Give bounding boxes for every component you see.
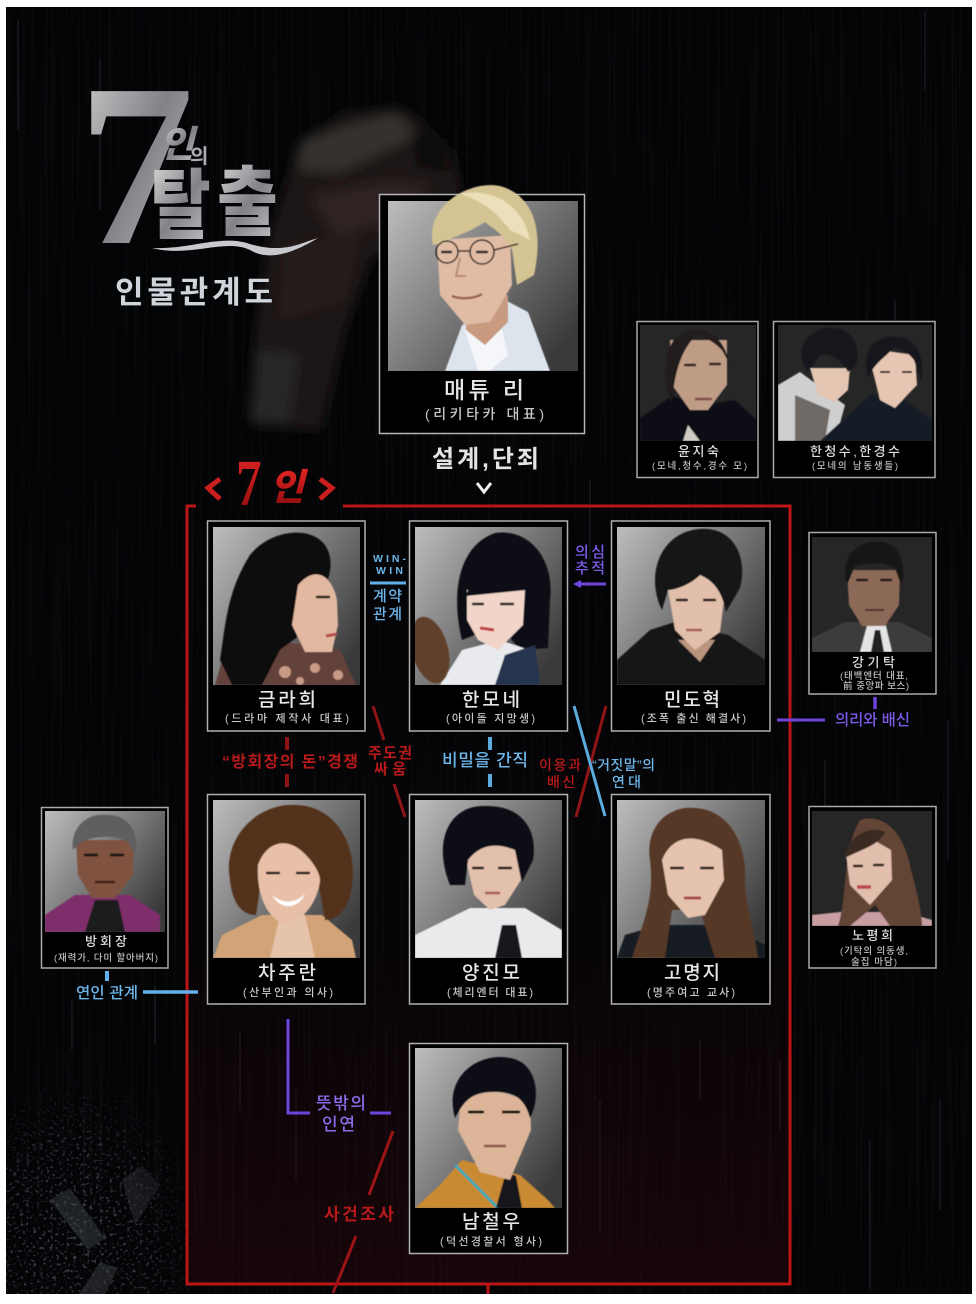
logo: 7인의 탈출: 인 bbox=[160, 124, 199, 165]
portrait: 민도혁 bbox=[617, 529, 765, 685]
card: 한모네 bbox=[404, 521, 568, 731]
name: 윤지숙 bbox=[678, 444, 719, 459]
relation: 의심 추적 arrow bbox=[573, 544, 606, 588]
relation: 뜻밖의 인연: 인연 bbox=[322, 1115, 355, 1134]
name: 금라희 bbox=[258, 689, 316, 711]
name: 남철우 bbox=[462, 1211, 520, 1233]
relation: 사건조사: 사건조사 bbox=[324, 1205, 394, 1224]
relation: 사건조사 bbox=[324, 1131, 394, 1293]
heading label: 7인: 인 bbox=[270, 467, 309, 508]
relation: WIN-WIN 계약관계: WIN bbox=[376, 565, 403, 577]
relation: 비밀을 간직 bbox=[442, 737, 528, 787]
role: (모네의 남동생들) bbox=[812, 460, 898, 472]
role: (조폭 출신 해결사) bbox=[641, 712, 746, 725]
portrait: 고명지 bbox=[617, 808, 765, 958]
role: (산부인과 의사) bbox=[243, 986, 333, 999]
portrait: 노평희 bbox=[812, 818, 932, 926]
name: 민도혁 bbox=[664, 689, 720, 711]
portrait: 방회장 bbox=[45, 815, 160, 932]
logo: 7인의 탈출: 의 bbox=[190, 145, 208, 168]
card: 강기탁: 前 중앙파 보스) bbox=[843, 680, 909, 692]
arrow: chevron down bbox=[477, 483, 491, 492]
relation: 이용과 배신: 이용과 bbox=[539, 757, 581, 773]
card: 양진모 bbox=[410, 794, 568, 1004]
role: (체리엔터 대표) bbox=[447, 985, 533, 999]
background: debris and splash bottom left bbox=[6, 1088, 191, 1294]
card: 고명지 bbox=[612, 794, 770, 1004]
card: 남철우 bbox=[410, 1044, 568, 1254]
title: 인물관계도: 인물관계도 bbox=[115, 275, 273, 310]
card: 금라희 bbox=[208, 521, 365, 731]
relation: WIN-WIN 계약관계: WIN- bbox=[373, 553, 406, 565]
name: 매튜 리 bbox=[444, 377, 524, 403]
role: (기탁의 의동생, bbox=[840, 945, 908, 957]
relation: 연인 관계: 연인 관계 bbox=[76, 984, 138, 1002]
heading label: 7인: 7 bbox=[236, 446, 261, 520]
name: 고명지 bbox=[664, 962, 720, 984]
relation: 뜻밖의 인연 bbox=[288, 1019, 391, 1134]
card: 한청수, 한경수 bbox=[774, 322, 935, 478]
card: 차주란 bbox=[208, 794, 365, 1004]
relation: 의심 추적 arrow: 의심 bbox=[575, 544, 605, 561]
card: 민도혁 bbox=[612, 521, 770, 731]
relation: 거짓말의 연대: 연대 bbox=[612, 774, 641, 790]
name: 강기탁 bbox=[852, 655, 895, 670]
relation: WIN-WIN 계약관계 bbox=[370, 553, 406, 623]
name: 한청수,한경수 bbox=[810, 444, 900, 459]
name: 방회장 bbox=[85, 934, 127, 949]
text: 설계, 단죄: 설계,단죄 bbox=[432, 446, 539, 473]
role: (명주여고 교사) bbox=[647, 986, 735, 999]
role: (태백엔터 대표, bbox=[840, 670, 908, 682]
relation: 이용과 배신 bbox=[539, 706, 606, 817]
portrait: 윤지숙 bbox=[640, 330, 757, 441]
relation: 방회장의 돈 경쟁: “방회장의 돈”경쟁 bbox=[222, 753, 358, 771]
logo: 7인의 탈출: 탈 bbox=[150, 165, 211, 249]
role: (모네,청수,경수 모) bbox=[652, 460, 747, 472]
role: (덕선경찰서 형사) bbox=[440, 1234, 542, 1248]
relation: WIN-WIN 계약관계: 관계 bbox=[373, 606, 402, 623]
logo: 7인의 탈출: 출 bbox=[217, 162, 278, 246]
relation: 의심 추적 arrow: 추적 bbox=[575, 560, 605, 577]
relation: 의리와 배신: 의리와 배신 bbox=[835, 711, 910, 729]
relation: WIN-WIN 계약관계: 계약 bbox=[373, 588, 402, 605]
portrait: 한모네 bbox=[404, 532, 551, 688]
relation: 거짓말의 연대: “거짓말”의 bbox=[592, 757, 655, 773]
relation: 주도권 싸움: 싸움 bbox=[374, 761, 406, 778]
red frame: the seven bbox=[187, 506, 790, 1294]
relation: 의리와 배신 bbox=[777, 697, 910, 729]
role: (아이돌 지망생) bbox=[446, 712, 535, 725]
portrait: 차주란 bbox=[213, 805, 356, 958]
card: 윤지숙 bbox=[637, 322, 758, 478]
card: 노평희 bbox=[809, 806, 936, 968]
relation: 거짓말의 연대 bbox=[574, 706, 655, 816]
portrait: 남철우 bbox=[415, 1057, 555, 1208]
card: 매튜 리 bbox=[380, 185, 584, 434]
role: (재력가, 다미 할아버지) bbox=[54, 952, 158, 964]
role: (드라마 제작사 대표) bbox=[225, 711, 349, 725]
name: 양진모 bbox=[462, 962, 520, 984]
card: 방회장 bbox=[42, 808, 168, 968]
relation: 비밀을 간직: 비밀을 간직 bbox=[442, 751, 528, 770]
name: 차주란 bbox=[258, 962, 316, 984]
logo: 7인의 탈출 bbox=[78, 37, 318, 294]
relation: 뜻밖의 인연: 뜻밖의 bbox=[316, 1094, 366, 1113]
heading label: 7인 bbox=[208, 446, 332, 520]
portrait: 강기탁 bbox=[812, 542, 932, 652]
portrait: 매튜 리 bbox=[432, 185, 550, 371]
portrait: 양진모 bbox=[415, 806, 562, 958]
relation: 주도권 싸움 bbox=[368, 706, 412, 817]
card: 노평희: 술집 마담) bbox=[851, 956, 897, 968]
logo: 7인의 탈출: 7 bbox=[78, 37, 194, 294]
card: 강기탁 bbox=[809, 532, 936, 694]
background: hand silhouette bbox=[249, 108, 462, 430]
relation: 방회장의 돈 경쟁 bbox=[222, 737, 358, 787]
portrait: 금라희 bbox=[215, 533, 356, 685]
name: 노평희 bbox=[852, 928, 893, 943]
portrait: 한청수, 한경수 bbox=[778, 328, 932, 441]
role: (리키타카 대표) bbox=[425, 406, 544, 422]
name: 한모네 bbox=[462, 689, 520, 711]
relation: 주도권 싸움: 주도권 bbox=[368, 745, 412, 762]
relation: 연인 관계 bbox=[76, 971, 198, 1002]
relation: 이용과 배신: 배신 bbox=[547, 774, 575, 790]
